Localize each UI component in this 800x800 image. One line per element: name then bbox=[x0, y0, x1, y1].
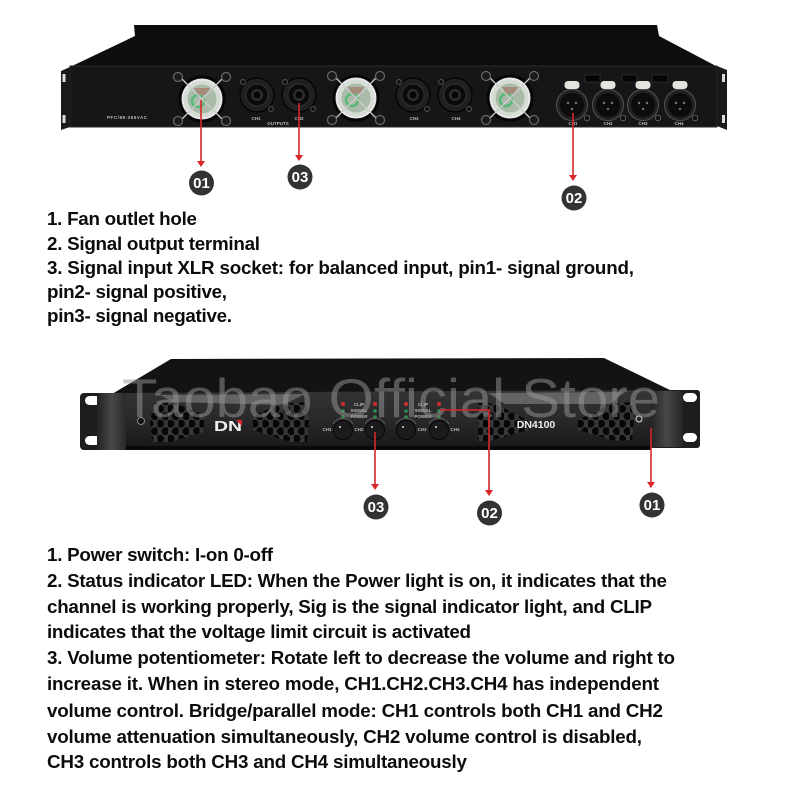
callout 02 rear: 02 bbox=[566, 190, 582, 207]
text block: front panel legend: volume attenuation simultaneously, CH2 volume control is disabled, bbox=[47, 726, 642, 747]
power rating label: PFC/88-265VAC bbox=[107, 115, 148, 120]
left rack ear bbox=[61, 67, 70, 130]
text block: rear panel legend: 1. Fan outlet hole bbox=[47, 208, 197, 229]
volume knobs bbox=[333, 418, 449, 440]
rear panel bbox=[70, 66, 717, 127]
callout 03 rear bbox=[288, 103, 312, 190]
input labels: CH2 bbox=[603, 121, 613, 126]
model label: DN4100 bbox=[517, 419, 555, 431]
text block: front panel legend: channel is working properly, Sig is the signal indicator light, and CLIP bbox=[47, 596, 652, 617]
text block: rear panel legend: 3. Signal input XLR socket: for balanced input, pin1- signal ground, bbox=[47, 257, 634, 278]
status leds bbox=[341, 402, 441, 419]
left rack ear bbox=[80, 393, 130, 450]
channel labels bbox=[322, 427, 460, 432]
right rack ear bbox=[650, 390, 700, 448]
text block: front panel legend: 3. Volume potentiometer: Rotate left to decrease the volume and right to bbox=[47, 647, 675, 668]
channel labels: CH3 bbox=[417, 427, 427, 432]
front chassis top surface bbox=[112, 358, 672, 394]
text block: rear panel legend: pin2- signal positive, bbox=[47, 281, 227, 302]
status leds: SIGNAL bbox=[414, 408, 432, 413]
status leds: SIGNAL bbox=[350, 408, 368, 413]
output labels: CH3 bbox=[409, 116, 419, 121]
text block: front panel legend bbox=[47, 544, 675, 772]
hexagon grilles bbox=[150, 402, 634, 442]
callout 01 rear: 01 bbox=[193, 175, 210, 192]
text block: rear panel legend: 2. Signal output terminal bbox=[47, 233, 260, 254]
text block: rear panel legend: pin3- signal negative. bbox=[47, 305, 232, 326]
status leds: CLIP bbox=[354, 402, 364, 407]
fans bbox=[174, 72, 538, 126]
speaker output terminals bbox=[240, 78, 472, 112]
output labels: CH2 bbox=[294, 116, 304, 121]
output labels: OUTPUTS bbox=[267, 121, 289, 126]
text block: front panel legend: 1. Power switch: I-on 0-off bbox=[47, 544, 274, 565]
text block: front panel legend: increase it. When in stereo mode, CH1.CH2.CH3.CH4 has independent bbox=[47, 673, 660, 694]
input labels: CH1 bbox=[568, 121, 578, 126]
output labels: CH4 bbox=[451, 116, 461, 121]
text block: front panel legend: CH3 controls both CH3 and CH4 simultaneously bbox=[47, 751, 468, 772]
front panel bbox=[126, 390, 651, 449]
callout 02 rear bbox=[562, 113, 586, 210]
channel labels: CH4 bbox=[450, 427, 460, 432]
output labels bbox=[251, 116, 461, 126]
power switch bbox=[138, 416, 642, 424]
front view of amplifier bbox=[80, 358, 700, 450]
callout 01 front: 01 bbox=[644, 497, 660, 514]
callout 01 front bbox=[640, 428, 664, 518]
text block: front panel legend: 2. Status indicator LED: When the Power light is on, it indicates that the bbox=[47, 570, 667, 591]
channel labels: CH1 bbox=[322, 427, 332, 432]
input labels: CH4 bbox=[674, 121, 684, 126]
callout 01 rear bbox=[189, 100, 214, 196]
right rack ear bbox=[717, 66, 727, 130]
rear view of amplifier bbox=[61, 25, 727, 130]
text block: front panel legend: volume control. Bridge/parallel mode: CH1 controls both CH1 and CH2 bbox=[47, 700, 663, 721]
callout 03 front: 03 bbox=[368, 499, 384, 516]
text block: rear panel legend bbox=[47, 208, 634, 326]
text block: front panel legend: indicates that the voltage limit circuit is activated bbox=[47, 621, 471, 642]
input labels bbox=[568, 121, 684, 126]
input labels: CH3 bbox=[638, 121, 648, 126]
callout 03 front bbox=[364, 432, 388, 520]
watermark: Taobao Official Store bbox=[122, 367, 660, 429]
callout 03 rear: 03 bbox=[292, 169, 308, 186]
xlr input sockets bbox=[556, 81, 698, 121]
status leds: POWER bbox=[350, 414, 368, 419]
channel labels: CH2 bbox=[354, 427, 364, 432]
handle highlights bbox=[160, 392, 625, 405]
status leds: CLIP bbox=[418, 402, 428, 407]
callout 02 front: 02 bbox=[481, 505, 498, 522]
input mode switches bbox=[585, 75, 668, 82]
output labels: CH1 bbox=[251, 116, 261, 121]
DN logo: DN bbox=[214, 418, 242, 435]
rear chassis top surface bbox=[72, 25, 716, 66]
status leds: POWER bbox=[414, 414, 432, 419]
callout 02 front bbox=[440, 410, 502, 526]
